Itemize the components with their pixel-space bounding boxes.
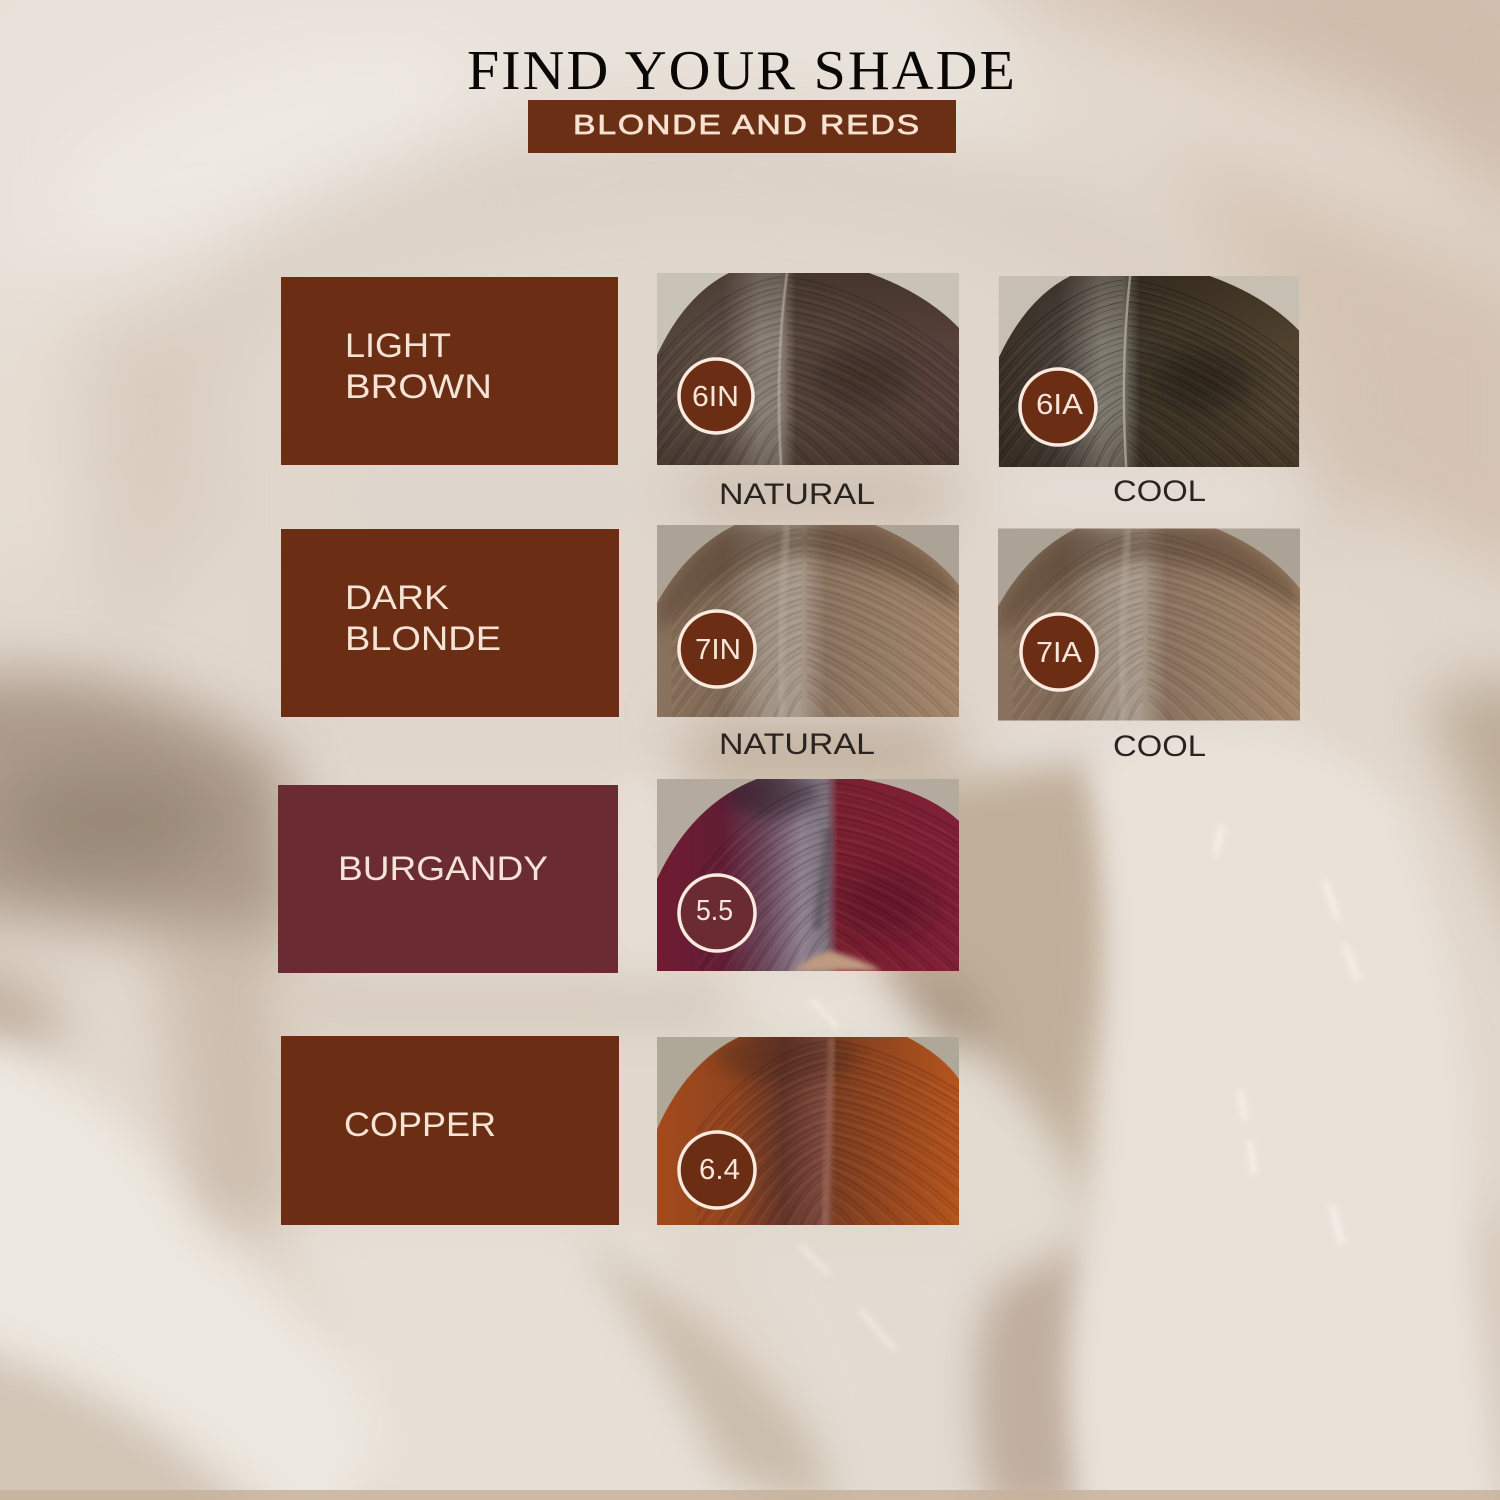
badge: 5.5 (679, 875, 755, 951)
swatch: 6IN natural (657, 273, 959, 465)
panel: light brown (281, 277, 618, 465)
panel: burgandy: BURGANDY (338, 850, 548, 888)
subtitle banner: BLONDE AND REDS (573, 109, 921, 140)
label: natural: NATURAL (719, 478, 875, 511)
badge: 6.4: 6.4 (699, 1154, 740, 1186)
badge: 7IA (1021, 614, 1097, 690)
panel: dark blonde: DARK (345, 579, 449, 617)
badge: 6IA (1020, 369, 1096, 445)
swatch: 7IA cool (998, 528, 1300, 720)
badge: 6IN: 6IN (692, 381, 739, 413)
label: natural: NATURAL (719, 728, 875, 761)
badge: 6IA: 6IA (1036, 389, 1084, 421)
badge: 7IA: 7IA (1036, 637, 1083, 669)
panel: copper: COPPER (344, 1106, 496, 1144)
badge: 6IN (679, 359, 753, 433)
title: FIND YOUR SHADE (467, 40, 1017, 102)
swatch: 6IA cool (998, 276, 1300, 467)
panel: light brown: BROWN (345, 368, 492, 406)
panel: dark blonde (281, 529, 619, 717)
badge: 7IN: 7IN (695, 634, 741, 666)
badge: 7IN (679, 611, 755, 687)
panel: dark blonde: BLONDE (345, 620, 501, 658)
panel: light brown: LIGHT (345, 327, 451, 365)
label: cool: COOL (1113, 475, 1206, 508)
panel: copper (281, 1036, 619, 1225)
subtitle banner (528, 100, 956, 153)
badge: 6.4 (679, 1132, 755, 1208)
panel: burgandy (278, 785, 618, 973)
label: cool: COOL (1113, 730, 1206, 763)
swatch: 7IN natural (657, 525, 959, 717)
badge: 5.5: 5.5 (696, 895, 733, 927)
swatch: 5.5 burgundy (657, 779, 959, 971)
swatch: 6.4 copper (657, 1037, 959, 1225)
